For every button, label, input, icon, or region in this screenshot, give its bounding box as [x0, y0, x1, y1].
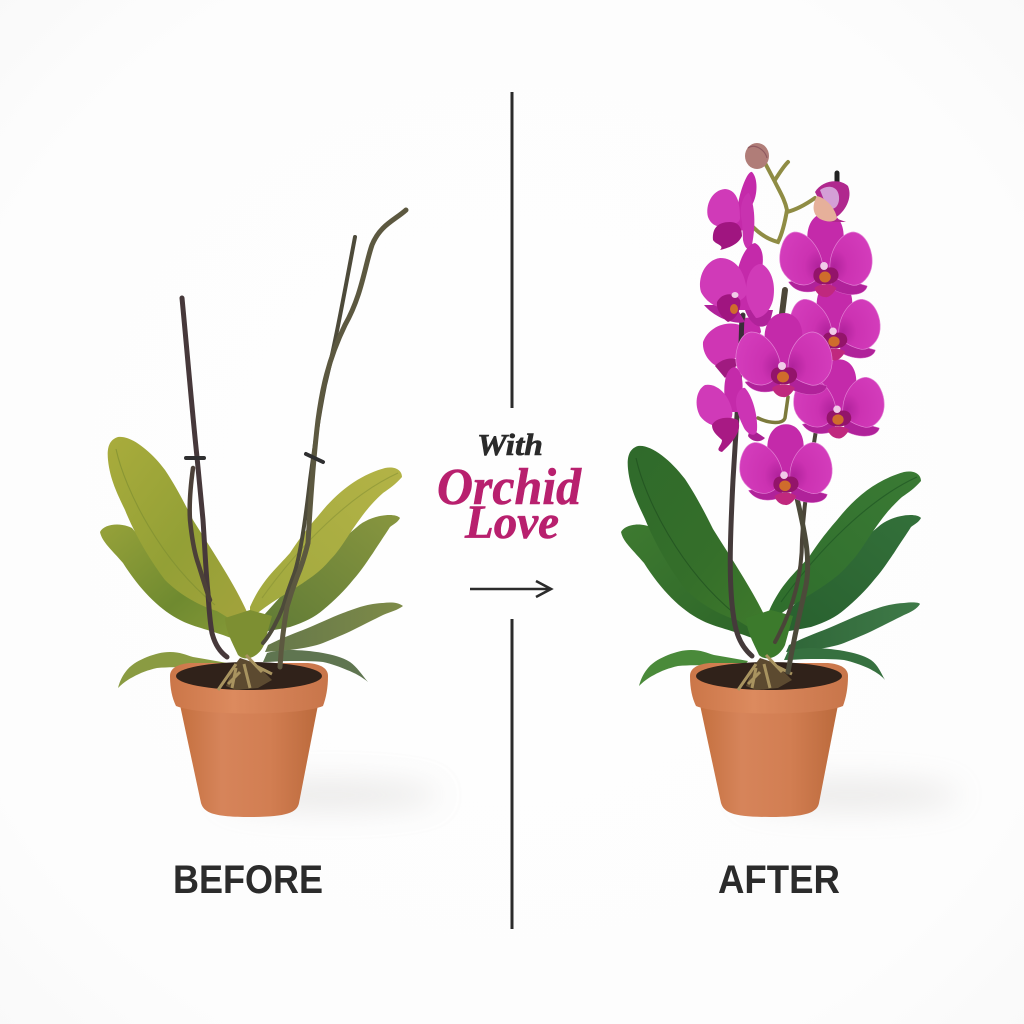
- before: low leaves: [118, 650, 368, 688]
- title: With Orchid Love: With: [477, 427, 543, 462]
- bud: [745, 143, 769, 169]
- after: back leaves: [621, 515, 921, 652]
- before: stems: [182, 210, 406, 667]
- flower turned: [700, 243, 774, 327]
- before: pot: [170, 655, 328, 817]
- flower back: [703, 318, 761, 378]
- before: back leaves: [100, 515, 403, 652]
- after plant: [621, 143, 921, 817]
- pot shadows: [220, 780, 960, 810]
- title: With Orchid Love: Orchid: [437, 459, 582, 516]
- after: big left leaf: [628, 446, 767, 631]
- before label: BEFORE: [173, 858, 323, 902]
- centre divider: [510, 92, 514, 929]
- after: big right leaf: [769, 471, 921, 624]
- after: pot: [690, 655, 848, 817]
- flower: [780, 213, 872, 297]
- before: main leaves: [108, 437, 402, 622]
- flower top side: [707, 172, 756, 250]
- after: flower spike: [697, 143, 884, 505]
- title: With Orchid Love: Love: [464, 496, 559, 549]
- after label: AFTER: [718, 858, 840, 902]
- stem piece: [741, 314, 742, 345]
- before: crown: [225, 610, 272, 658]
- after: crown: [746, 610, 793, 658]
- flower: [794, 359, 884, 439]
- flower: [740, 424, 832, 505]
- title: With Orchid Love: [437, 427, 582, 549]
- before plant: [100, 210, 406, 817]
- flower: [736, 313, 832, 397]
- flower side: [697, 367, 765, 452]
- flower: [790, 281, 880, 361]
- after: stems: [730, 162, 837, 672]
- arrow: [470, 581, 551, 597]
- after: low leaves: [639, 648, 885, 686]
- half-open bud: [814, 181, 850, 222]
